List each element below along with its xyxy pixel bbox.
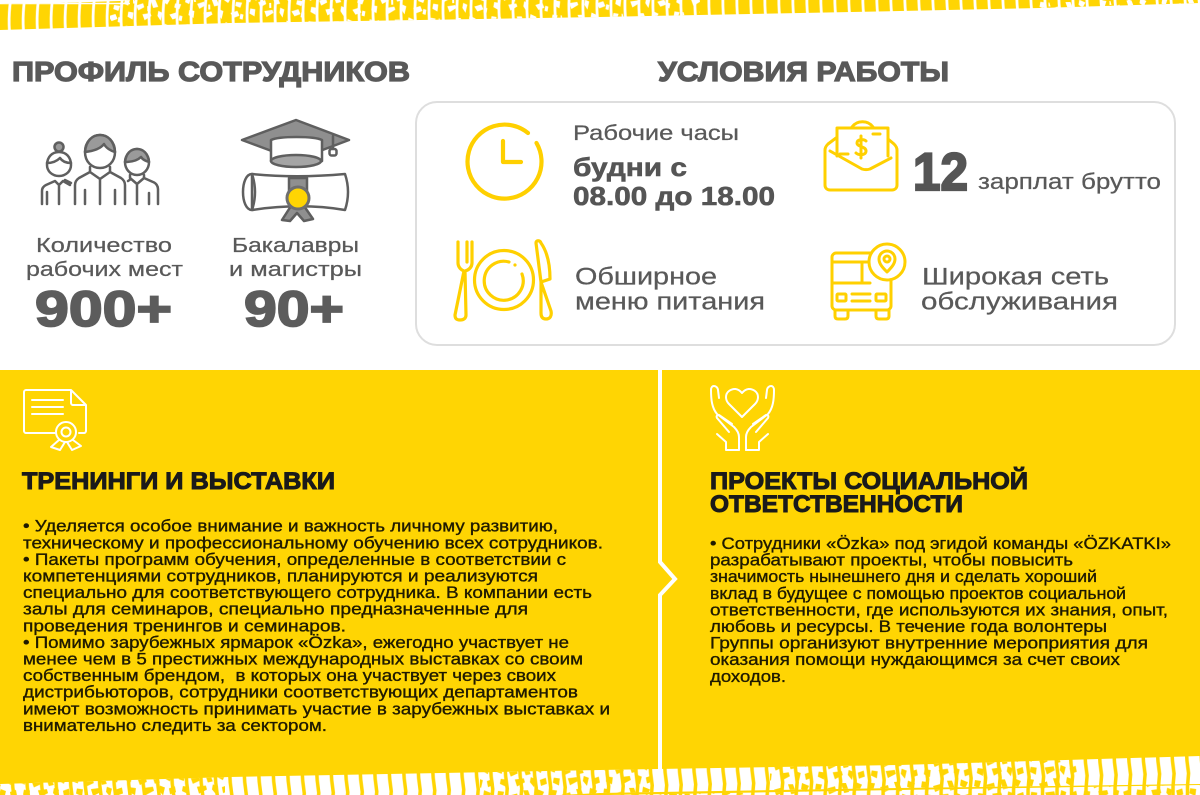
icon: service bus and map pin — [832, 244, 905, 319]
icon: salary envelope — [825, 122, 897, 190]
stat: jobs count — [26, 234, 184, 337]
text: trainings body: собственным брендом, в которых она участвует через своих — [23, 667, 557, 685]
text: social responsibility body: любовь и ресурсы. В течение года волонтеры — [710, 618, 1107, 636]
top tire track band — [0, 0, 1200, 32]
text: trainings body: залы для семинаров, специально предназначенные для — [23, 601, 528, 619]
text: trainings body: компетенциями сотрудников, планируются и реализуются — [23, 568, 538, 586]
stat: bachelors and masters: 90+ — [244, 281, 344, 337]
text: food menu — [575, 264, 765, 316]
text: trainings body: • Пакеты программ обучения, определенные в соответствии с — [23, 551, 566, 569]
heading: working conditions: УСЛОВИЯ РАБОТЫ — [658, 56, 949, 87]
text: trainings body: • Уделяется особое внимание и важность личному развитию, — [23, 518, 558, 536]
text: social responsibility body: разрабатывают проекты, чтобы повысить — [710, 552, 1073, 570]
text: social responsibility body: значимость нынешнего дня и сделать хороший — [710, 568, 1097, 586]
text: working hours — [573, 122, 775, 211]
text: working hours: 08.00 до 18.00 — [573, 181, 775, 211]
text: trainings body: внимательно следить за сектором. — [23, 717, 327, 735]
text: social responsibility body — [710, 535, 1171, 686]
text: trainings body — [23, 518, 610, 735]
text: twelve gross salaries — [913, 143, 1161, 202]
text: social responsibility body: оказания помощи нуждающимся за счет своих — [710, 651, 1121, 669]
heading: social responsibility projects: ПРОЕКТЫ СОЦИАЛЬНОЙ — [710, 467, 1028, 495]
icon: graduation cap and diploma — [242, 120, 349, 221]
panel: yellow background — [0, 370, 1200, 795]
icon: clock — [468, 125, 542, 199]
bottom tire track band — [0, 756, 1200, 795]
stat: jobs count: Количество — [36, 234, 172, 257]
text: social responsibility body: • Сотрудники «Özka» под эгидой команды «ÖZKATKI» — [710, 535, 1171, 553]
text: twelve gross salaries: зарплат брутто — [978, 169, 1161, 194]
text: trainings body: проведения тренингов и семинаров. — [23, 617, 346, 635]
text: service network: Широкая сеть — [922, 264, 1109, 290]
text: social responsibility body: доходов. — [710, 668, 786, 686]
stat: bachelors and masters: Бакалавры — [232, 234, 359, 257]
stat: bachelors and masters: и магистры — [229, 258, 362, 281]
text: working hours: будни с — [573, 152, 687, 182]
icon: employees group — [42, 135, 158, 204]
heading: social responsibility projects — [710, 467, 1028, 518]
text: trainings body: менее чем в 5 престижных международных выставках со своим — [23, 650, 583, 668]
text: service network: обслуживания — [921, 288, 1118, 316]
stat: jobs count: 900+ — [35, 281, 172, 337]
text: twelve gross salaries: 12 — [913, 143, 968, 202]
text: service network — [921, 264, 1118, 316]
text: trainings body: специально для соответствующего сотрудника. В компании есть — [23, 584, 592, 602]
text: trainings body: • Помимо зарубежных ярмарок «Özka», ежегодно участвует не — [23, 634, 569, 652]
panel: working conditions — [416, 102, 1175, 345]
text: food menu: меню питания — [575, 288, 765, 316]
text: trainings body: техническому и профессиональному обучению всех сотрудников. — [23, 534, 603, 552]
icon: hands holding heart — [711, 386, 774, 450]
icon: training certificate — [24, 390, 86, 450]
stat: jobs count: рабочих мест — [26, 258, 184, 281]
heading: employee profile: ПРОФИЛЬ СОТРУДНИКОВ — [12, 56, 410, 87]
text: food menu: Обширное — [575, 264, 717, 290]
stat: bachelors and masters — [229, 234, 362, 337]
text: working hours: Рабочие часы — [573, 122, 739, 145]
icon: cutlery and plate — [455, 241, 551, 320]
text: social responsibility body: Группы организуют внутренние мероприятия для — [710, 635, 1148, 653]
heading: trainings and exhibitions: ТРЕНИНГИ И ВЫСТАВКИ — [22, 468, 335, 495]
heading: social responsibility projects: ОТВЕТСТВЕННОСТИ — [710, 491, 963, 518]
text: trainings body: имеют возможность принимать участие в зарубежных выставках и — [23, 700, 610, 718]
text: social responsibility body: вклад в будущее с помощью проектов социальной — [710, 585, 1126, 603]
text: social responsibility body: ответственности, где используются их знания, опыт, — [710, 601, 1168, 619]
text: trainings body: дистрибьюторов, сотрудники соответствующих департаментов — [23, 684, 578, 702]
divider chevron — [660, 370, 675, 770]
